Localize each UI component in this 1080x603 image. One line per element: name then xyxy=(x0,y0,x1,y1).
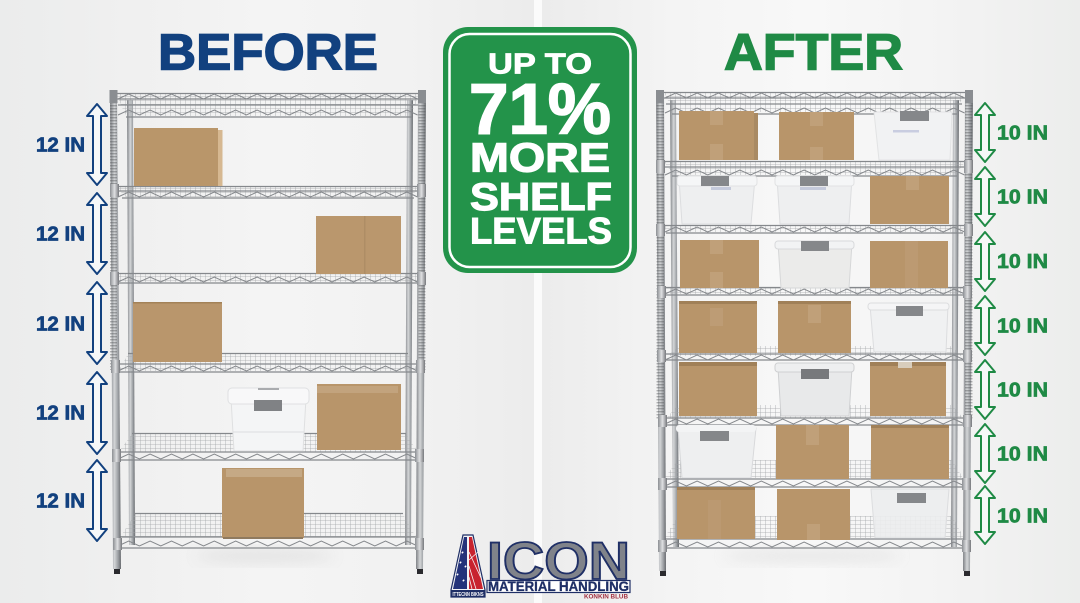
box: second shelf xyxy=(316,216,401,274)
heading: before: BEFORE xyxy=(158,24,378,80)
shelf 7 xyxy=(664,460,965,487)
badge inner border xyxy=(450,34,630,267)
dimension 3: 12 IN xyxy=(36,312,85,336)
rear posts xyxy=(670,100,959,547)
shelf 3 xyxy=(664,226,965,233)
dimension 1 xyxy=(36,104,107,185)
shelf 5 xyxy=(665,346,965,360)
post collars xyxy=(110,184,426,550)
box: fourth shelf xyxy=(317,384,401,450)
dimension 3 xyxy=(975,232,1048,291)
dimension 1 xyxy=(975,103,1048,162)
bin xyxy=(775,176,854,224)
row 7 boxes and bin xyxy=(677,487,949,540)
shelf 6 xyxy=(665,405,965,425)
logo mark: tower xyxy=(451,535,485,598)
shelf 4 xyxy=(118,354,418,372)
background: after side xyxy=(541,0,1080,603)
dimension 2 xyxy=(975,167,1048,226)
front posts xyxy=(656,90,973,571)
box xyxy=(776,425,849,479)
box: first shelf xyxy=(134,128,222,186)
badge text: levels: LEVELS xyxy=(470,210,612,252)
dimension 6 xyxy=(975,424,1048,483)
dimension 2: 10 IN xyxy=(997,186,1048,208)
logo subtitle: material handling: MATERIAL HANDLING xyxy=(488,579,629,594)
row 1 boxes and bin xyxy=(679,111,952,160)
row 3 boxes and bin xyxy=(680,240,948,288)
box xyxy=(679,111,758,160)
front posts xyxy=(110,90,426,569)
logo tagline: KONKIN BLUB xyxy=(584,594,629,600)
shelf 8 xyxy=(664,516,965,548)
post collars xyxy=(656,160,973,552)
dimension 5 xyxy=(36,460,107,541)
box xyxy=(871,425,949,479)
dimension 7: 10 IN xyxy=(997,504,1048,528)
dimension 5: 10 IN xyxy=(997,378,1048,402)
badge text: shelf: SHELF xyxy=(470,176,612,219)
shelf 2 xyxy=(664,162,965,176)
box xyxy=(779,112,854,160)
dimension 2: 12 IN xyxy=(36,222,85,246)
floor shadow xyxy=(195,550,335,562)
feet xyxy=(660,571,970,576)
row 6 bin and boxes xyxy=(676,425,949,479)
feet xyxy=(114,569,423,574)
shelf 3 xyxy=(118,274,418,283)
logo wordmark: icon: ICON xyxy=(487,532,630,591)
box xyxy=(870,241,948,288)
row 4 boxes and bin xyxy=(679,301,949,353)
callout badge: up to 71% more shelf levels xyxy=(443,27,637,273)
shelf 4 xyxy=(664,288,965,295)
row 2 bins and box xyxy=(677,176,949,224)
dimension 4 xyxy=(975,296,1048,355)
bin xyxy=(775,241,854,288)
row 5 boxes and bin xyxy=(679,362,946,416)
bin xyxy=(874,111,952,160)
dimension 3 xyxy=(36,282,107,364)
bin xyxy=(871,489,949,538)
dimension 5 xyxy=(975,360,1048,419)
box xyxy=(677,487,755,539)
dimension 2 xyxy=(36,193,107,274)
after height dimensions xyxy=(975,103,1048,544)
box xyxy=(778,301,851,353)
bin xyxy=(868,303,949,352)
badge text: up to: UP TO xyxy=(488,48,592,80)
shelf 1 xyxy=(116,94,420,117)
rear posts xyxy=(127,100,413,545)
box: bottom shelf xyxy=(222,468,304,538)
box xyxy=(679,362,757,416)
dimension 4: 12 IN xyxy=(36,402,85,424)
brand logo xyxy=(451,532,630,600)
before wire shelving rack xyxy=(110,90,426,574)
dimension 4 xyxy=(36,372,107,454)
shelf 6 xyxy=(118,514,418,548)
dimension 1: 12 IN xyxy=(36,134,85,156)
dimension 1: 10 IN xyxy=(997,122,1048,144)
floor shadow xyxy=(722,550,902,562)
dimension 7 xyxy=(975,486,1048,544)
bin xyxy=(775,363,854,416)
box xyxy=(870,176,949,224)
shelf 5 xyxy=(118,434,418,460)
plastic bin: fourth shelf xyxy=(228,388,309,451)
box xyxy=(777,489,850,540)
background: before side xyxy=(0,0,535,603)
badge body xyxy=(443,27,637,273)
dimension 3: 10 IN xyxy=(997,250,1048,273)
heading: after: AFTER xyxy=(724,24,903,80)
badge text: more: MORE xyxy=(470,134,610,180)
box xyxy=(870,362,946,416)
shelf 1 xyxy=(664,92,965,114)
box: third shelf xyxy=(133,302,222,362)
center divider xyxy=(534,0,542,603)
after wire shelving rack xyxy=(656,90,973,576)
logo mark: tower: ITTECNN BIKNS xyxy=(452,592,484,598)
before height dimensions xyxy=(36,104,107,541)
dimension 4: 10 IN xyxy=(997,314,1048,338)
badge text: 71%: 71% xyxy=(469,70,611,150)
shelf 2 xyxy=(116,186,420,198)
bin xyxy=(677,176,757,224)
box xyxy=(680,240,759,288)
dimension 6: 10 IN xyxy=(997,442,1048,466)
bin xyxy=(676,425,756,478)
dimension 5: 12 IN xyxy=(36,490,85,512)
box xyxy=(679,301,757,353)
